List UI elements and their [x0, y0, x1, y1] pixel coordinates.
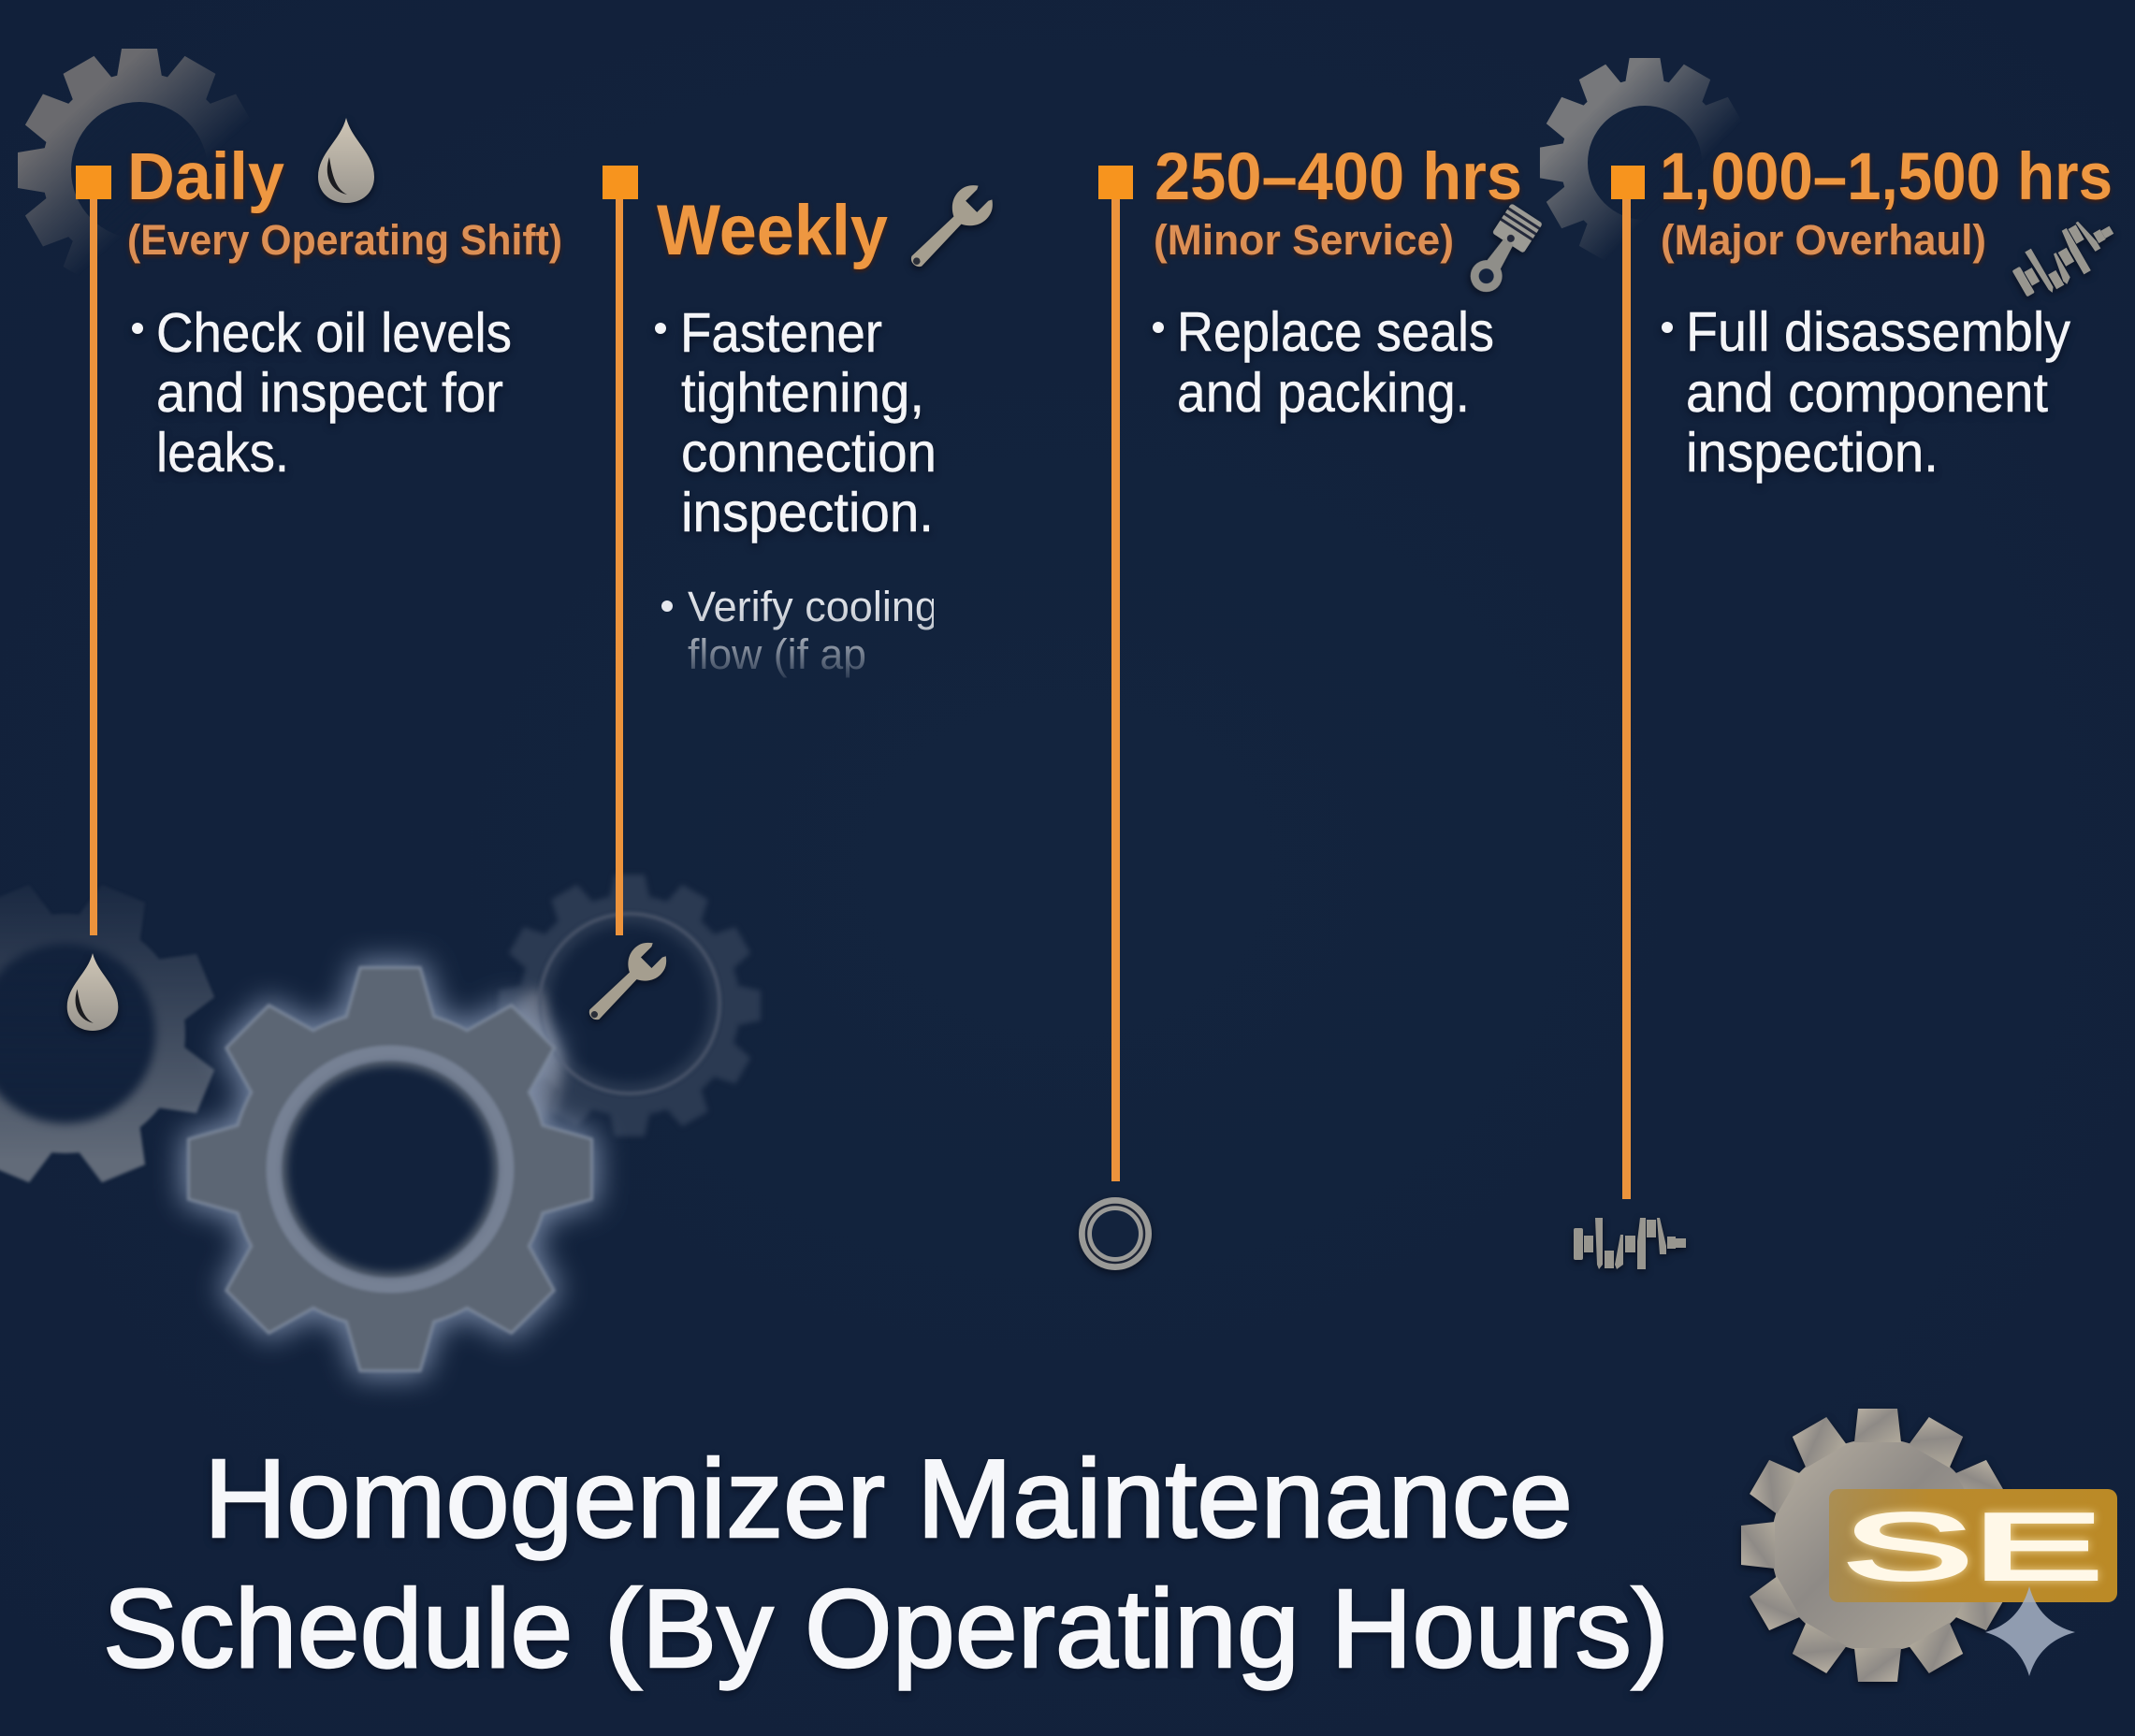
icon: oil drop at timeline end [67, 953, 118, 1031]
icon: piston [1462, 203, 1543, 299]
icon: oil drop [318, 118, 374, 203]
bullet: replace seals: and packing. [1177, 362, 1470, 424]
bullet: check oil levels [132, 302, 512, 484]
bullet: full disassembly: and component [1686, 362, 2048, 424]
decorative gear: large centre [190, 969, 590, 1369]
panel: weekly [603, 166, 999, 935]
logo gear [1741, 1409, 2014, 1682]
timeline marker and line: weekly [603, 166, 638, 935]
bullet: fastener tightening: tightening, [681, 362, 924, 424]
subheading: every operating shift: (Every Operating Shift) [127, 216, 562, 264]
timeline marker and line: minor service [1098, 166, 1133, 1181]
decorative gear: lower left [0, 881, 218, 1186]
icon: crankshaft [2007, 209, 2124, 305]
timeline marker and line: daily [76, 166, 111, 935]
icon: wrench at timeline end [578, 936, 673, 1031]
icon: seal ring at timeline end [1079, 1197, 1152, 1270]
panel: daily [76, 118, 562, 935]
bullet: verify cooling flow (faded): Verify cooling [688, 583, 938, 630]
decorative gear: top left [18, 49, 244, 269]
bullet: check oil levels: Check oil levels [156, 302, 512, 364]
icon: crankshaft at timeline end [1574, 1218, 1686, 1269]
bullet: fastener tightening: inspection. [681, 482, 934, 543]
decorative gear: faded lower right [499, 875, 761, 1136]
heading: Weekly: Weekly [657, 191, 888, 270]
title [103, 1437, 1669, 1691]
subheading: major overhaul: (Major Overhaul) [1661, 216, 1986, 264]
bullet: fastener tightening [655, 302, 937, 543]
timeline marker and line: major overhaul [1611, 166, 1645, 1199]
decorative gear: top right [1540, 58, 1736, 255]
heading: 250–400 hrs: 250–400 hrs [1155, 140, 1522, 214]
panel: 1,000-1,500 hrs [1611, 140, 2124, 1199]
bullet: verify cooling flow (faded): flow (if ap [688, 630, 866, 678]
bullet: fastener tightening: connection [681, 422, 937, 484]
title: Schedule (By Operating Hours) [103, 1567, 1669, 1691]
heading: Daily: Daily [127, 140, 285, 214]
bullet: verify cooling flow (faded) [661, 583, 938, 678]
sparkle star [1985, 1586, 2075, 1676]
title: Homogenizer Maintenance [204, 1437, 1573, 1561]
bullet: fastener tightening: Fastener [680, 302, 882, 364]
bullet: check oil levels: and inspect for [156, 362, 503, 424]
bullet: full disassembly: Full disassembly [1686, 301, 2070, 363]
bullet: replace seals: Replace seals [1177, 301, 1494, 363]
panel: 250-400 hrs [1098, 140, 1543, 1181]
subheading: minor service: (Minor Service) [1154, 216, 1454, 264]
logo [1741, 1409, 2117, 1682]
logo letters SE: SE [1843, 1495, 2102, 1599]
bullet: full disassembly [1662, 301, 2070, 484]
bullet: replace seals [1153, 301, 1494, 424]
bullet: full disassembly: inspection. [1686, 422, 1939, 484]
logo plate [1829, 1489, 2117, 1602]
icon: wrench [900, 179, 999, 278]
bullet: check oil levels: leaks. [156, 422, 289, 484]
